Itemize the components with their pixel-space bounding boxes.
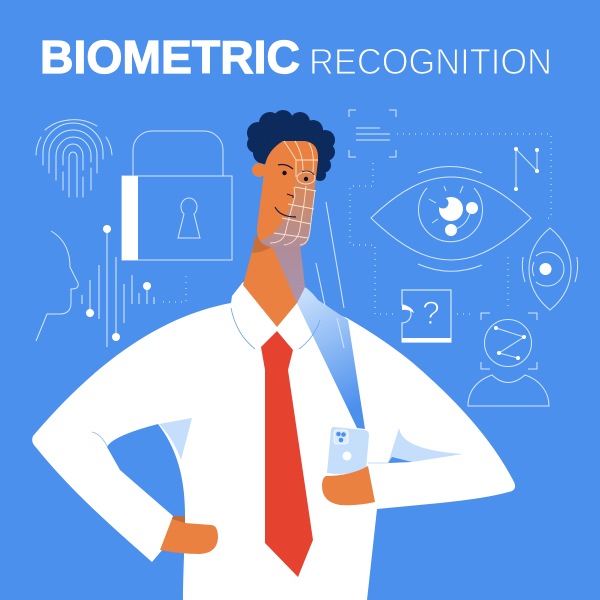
blue gap under left arm [107,424,185,516]
icon: fingerprint [36,120,112,197]
tie [261,331,313,577]
dotted connectors [350,134,551,314]
transparent collar band [297,287,365,429]
shirt inner fold [159,418,192,460]
icon: head profile [36,231,78,341]
collar lines [231,308,320,349]
man figure [32,110,515,600]
right sleeve fold [388,428,463,463]
neck [243,240,305,327]
icon: padlock [122,131,232,260]
title: BIOMETRIC [40,31,300,83]
face scan grid [270,141,318,245]
thin lines [316,202,344,348]
shirt [32,282,515,600]
head [257,141,318,247]
title: RECOGNITION [309,41,552,82]
title [40,31,552,83]
icon: puzzle question: ? [422,295,440,331]
right hand [322,466,375,505]
icon: document scan [349,110,396,157]
ear [252,163,266,177]
facial features [275,164,314,217]
phone [327,427,369,474]
icon: side eye [522,228,578,310]
chart: voice waveform [82,225,186,347]
left hand [160,516,218,554]
scanned face part [260,160,318,247]
hair [247,110,335,181]
icon: puzzle question [402,290,451,342]
icon: N constellation [514,147,539,191]
icon: large eye [371,166,531,271]
icon: face scan person [468,313,549,406]
